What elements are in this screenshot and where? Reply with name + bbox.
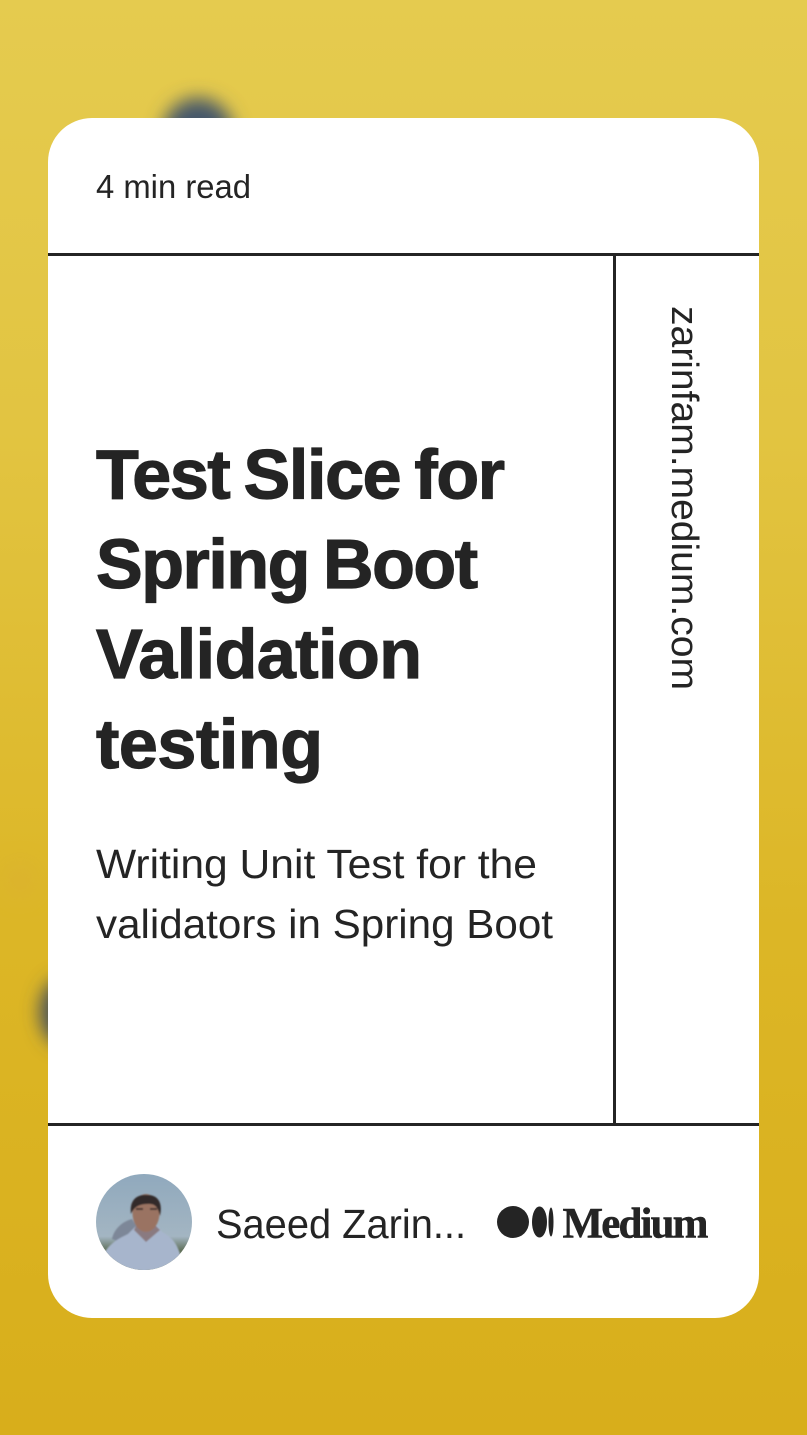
author avatar [96, 1174, 192, 1272]
subtitle [96, 841, 554, 947]
card panel [48, 118, 759, 1318]
title: Test Slice for [96, 436, 505, 514]
title: Validation [96, 615, 422, 693]
background faint spot [4, 862, 36, 898]
vertical site url: zarinfam.medium.com [663, 306, 705, 690]
read time: 4 min read [96, 168, 251, 205]
medium logo: Medium [562, 1200, 709, 1248]
author name: Saeed Zarin... [216, 1201, 466, 1247]
medium logo [497, 1200, 709, 1248]
title: Spring Boot [96, 525, 478, 603]
subtitle: validators in Spring Boot [96, 901, 554, 947]
title: testing [96, 705, 323, 783]
background blurred blob left [40, 978, 88, 1046]
title [96, 436, 505, 783]
subtitle: Writing Unit Test for the [96, 841, 537, 887]
background blurred blob top [162, 98, 234, 172]
